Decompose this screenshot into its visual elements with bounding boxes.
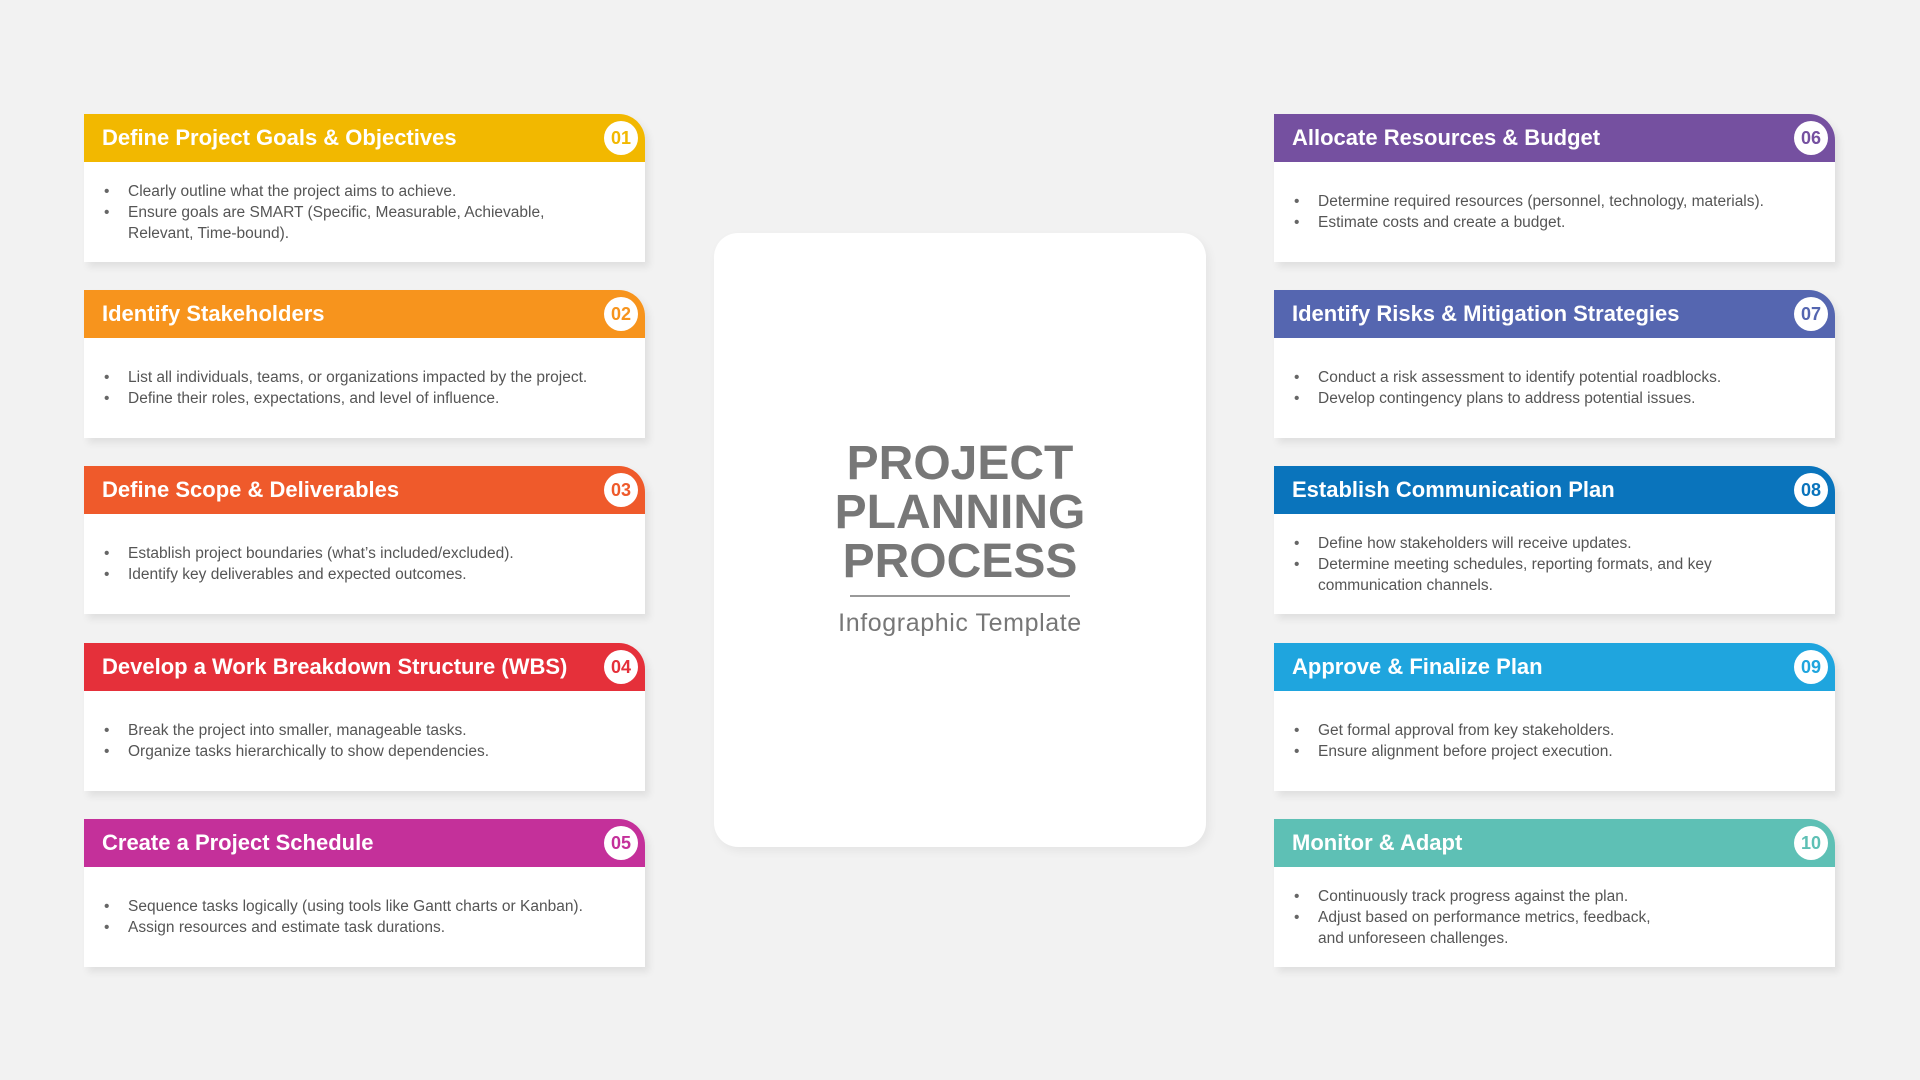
panel: step 09: Get formal approval from key stakeholders. [1318, 722, 1614, 739]
panel: step 02: List all individuals, teams, or organizations impacted by the project. [128, 369, 587, 386]
panel: step 05: Assign resources and estimate task durations. [128, 919, 445, 936]
panel: step 02: Identify Stakeholders [102, 301, 325, 326]
panel: step 05: Create a Project Schedule [102, 830, 373, 855]
panel: step 10: Continuously track progress against the plan. [1318, 888, 1628, 904]
panel: step 07: Identify Risks & Mitigation Strategies [1292, 301, 1680, 326]
title: PLANNING [835, 486, 1085, 539]
panel: step 03 [84, 466, 645, 614]
panel: step 06: Determine required resources (personnel, technology, materials). [1318, 193, 1764, 210]
panel: step 08: 08 [1801, 480, 1821, 500]
panel: step 04 [84, 643, 645, 791]
panel: step 05: 05 [611, 833, 631, 853]
panel: center title card [714, 233, 1206, 847]
panel: step 07 [1274, 290, 1835, 438]
panel: step 04: 04 [611, 657, 631, 677]
panel: step 10: Monitor & Adapt [1292, 830, 1462, 855]
panel: step 06: Estimate costs and create a budget. [1318, 214, 1565, 231]
panel: step 09 [1274, 643, 1835, 791]
panel: step 01 [84, 114, 645, 262]
panel: step 03: Identify key deliverables and expected outcomes. [128, 566, 467, 583]
panel: step 01: Ensure goals are SMART (Specific, Measurable, Achievable, [128, 204, 544, 220]
panel: step 06 [1274, 114, 1835, 262]
panel: step 08: Define how stakeholders will receive updates. [1318, 534, 1632, 552]
panel: step 10: and unforeseen challenges. [1318, 930, 1508, 946]
panel: step 03: Define Scope & Deliverables [102, 477, 399, 502]
panel: step 07: Conduct a risk assessment to identify potential roadblocks. [1318, 369, 1721, 386]
panel: step 08: Determine meeting schedules, reporting formats, and key communication channels. [1318, 556, 1712, 594]
panel: step 09: 09 [1801, 657, 1821, 677]
panel: step 10 [1274, 819, 1835, 967]
title: PROCESS [843, 535, 1077, 588]
panel: step 05 [84, 819, 645, 967]
panel: step 03: Establish project boundaries (what’s included/excluded). [128, 545, 514, 562]
panel: step 02: Define their roles, expectations, and level of influence. [128, 390, 499, 407]
panel: step 04: Organize tasks hierarchically to show dependencies. [128, 743, 489, 760]
panel: step 04: Develop a Work Breakdown Structure (WBS) [102, 654, 567, 679]
subtitle: Infographic Template [838, 609, 1082, 637]
panel: step 10: Adjust based on performance metrics, feedback, [1318, 908, 1651, 926]
panel: step 02 [84, 290, 645, 438]
panel: step 07: 07 [1801, 304, 1821, 324]
panel: step 07: Develop contingency plans to address potential issues. [1318, 390, 1695, 407]
panel: step 01: Relevant, Time-bound). [128, 224, 289, 242]
panel: step 01: Define Project Goals & Objectives [102, 125, 457, 150]
panel: step 06: Allocate Resources & Budget [1292, 125, 1600, 150]
panel: step 08: Establish Communication Plan [1292, 477, 1615, 502]
panel: step 10: 10 [1801, 833, 1821, 853]
panel: step 04: Break the project into smaller, manageable tasks. [128, 722, 467, 739]
title [835, 437, 1085, 588]
panel: step 03: 03 [611, 480, 631, 500]
panel: step 05: Sequence tasks logically (using tools like Gantt charts or Kanban). [128, 898, 583, 915]
panel: step 06: 06 [1801, 128, 1821, 148]
title: PROJECT [847, 437, 1073, 490]
panel: step 01: 01 [611, 128, 631, 148]
panel: step 09: Approve & Finalize Plan [1292, 654, 1543, 679]
panel: step 02: 02 [611, 304, 631, 324]
panel: step 01: Clearly outline what the project aims to achieve. [128, 182, 456, 200]
panel: step 09: Ensure alignment before project execution. [1318, 743, 1613, 760]
panel: step 08 [1274, 466, 1835, 614]
